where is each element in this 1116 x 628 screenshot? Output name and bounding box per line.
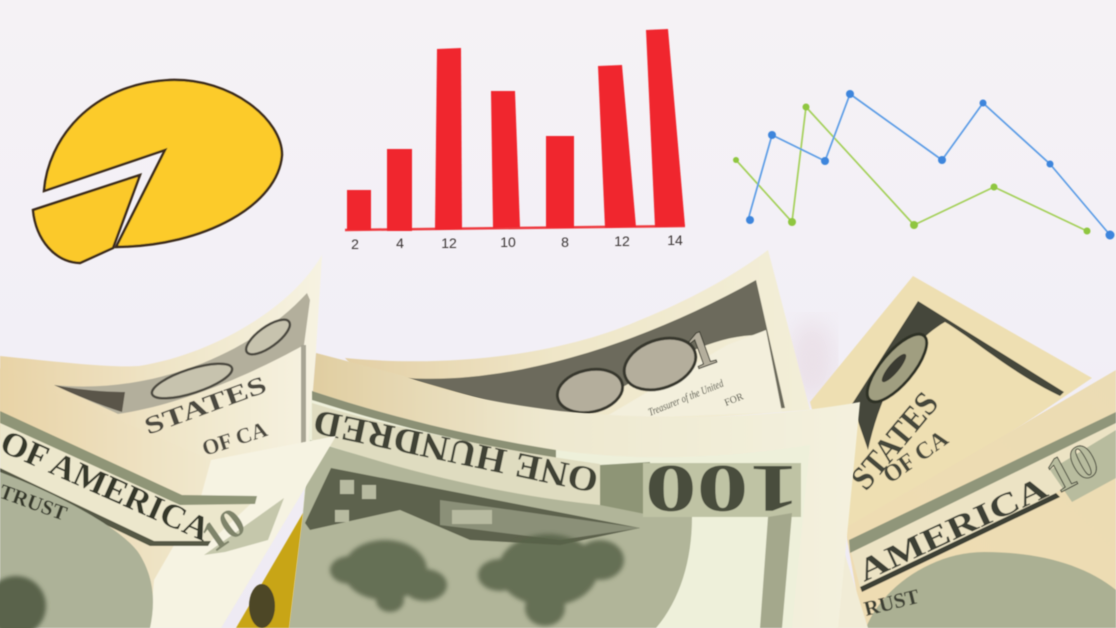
note numeral: 10: 10	[193, 499, 254, 561]
note text: states of ca	[141, 371, 270, 461]
note text: one hundred: ONE HUNDRED	[310, 402, 602, 501]
bar chart axis labels: 14	[667, 232, 683, 248]
icon: building on note	[305, 468, 640, 545]
face background	[289, 440, 692, 628]
note sliver	[836, 545, 868, 628]
banknote: back right	[810, 276, 1092, 530]
note text: trust: RUST	[861, 584, 922, 621]
banknote: back centre	[345, 250, 810, 440]
note text: states of ca: OF CA	[199, 416, 270, 461]
note numeral: 100	[643, 451, 801, 527]
icon: tree on note	[0, 576, 46, 628]
bar chart axis labels: 2	[351, 236, 359, 252]
bar chart axis labels: 12	[441, 235, 457, 251]
note text: america: AMERICA	[852, 469, 1053, 588]
note numeral: 10: 10	[1037, 431, 1107, 504]
bar chart: red bars	[345, 29, 685, 252]
banknote: front left	[0, 368, 336, 628]
icon: trees on note	[330, 534, 624, 626]
gold note corner	[236, 513, 303, 628]
note text: treasurer signature: Treasurer of the United	[647, 378, 726, 419]
banknote: front right	[836, 370, 1116, 628]
note text: states of america: STATES	[844, 385, 946, 497]
note text: states of america: OF CA	[879, 425, 954, 489]
note numeral: 100: 100	[645, 451, 800, 527]
bar chart axis labels: 10	[500, 234, 516, 250]
shadow beneath the bills	[790, 320, 834, 400]
border strip	[760, 513, 792, 628]
icon: yellow pie chart	[33, 80, 282, 263]
note numeral: 1: 1	[680, 319, 724, 381]
banknote: back centre: FOR	[723, 391, 745, 409]
note numeral: 10	[193, 498, 284, 561]
banknote: front centre	[289, 353, 860, 628]
bar chart axis labels: 8	[561, 234, 569, 250]
note text: states of ca: STATES	[141, 371, 270, 441]
line chart: blue and green lines	[733, 90, 1114, 240]
bar chart axis labels: 12	[614, 233, 630, 249]
bar chart axis labels	[351, 232, 683, 252]
banknote: back left	[0, 255, 322, 480]
note text: of america: OF AMERICA	[0, 424, 216, 549]
bar chart axis labels: 4	[396, 235, 404, 251]
